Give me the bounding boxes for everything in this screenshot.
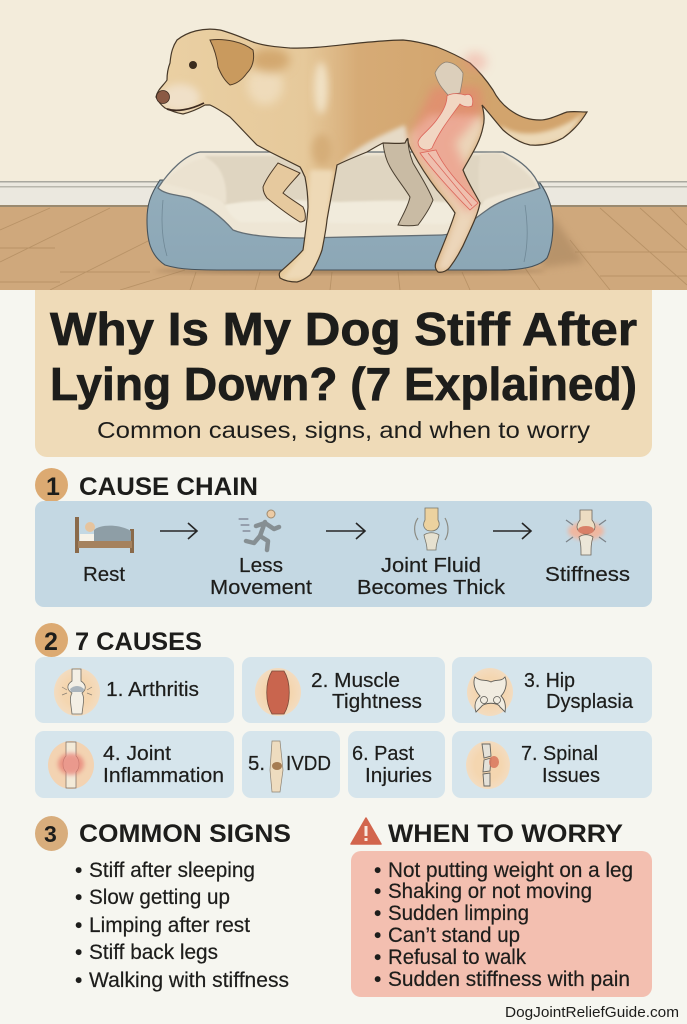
hero illustration: dog getting off a bed	[0, 0, 687, 290]
card 3: hip dysplasia	[452, 657, 652, 723]
wood floor	[0, 207, 687, 290]
card 2: muscle tightness	[242, 657, 445, 723]
list: common signs: Walking with stiffness	[89, 969, 289, 992]
dog bed	[147, 152, 553, 270]
label: less movement: Movement	[210, 576, 312, 599]
card 2: muscle tightness: Tightness	[332, 690, 422, 713]
belly shading	[337, 125, 410, 170]
card 6: past injuries: 6. Past	[352, 742, 414, 765]
right bolster	[478, 153, 537, 202]
bed back wall	[205, 155, 500, 205]
panel: when to worry: •	[374, 902, 381, 925]
icon: bed	[75, 517, 134, 553]
section 2 heading: 7 causes	[35, 623, 202, 657]
card 1: arthritis: 1. Arthritis	[106, 678, 199, 701]
list: common signs: •	[75, 969, 82, 992]
subtitle: Common causes, signs, and when to worry	[97, 417, 591, 443]
title panel	[35, 290, 652, 457]
section 1 heading: cause chain: 1	[46, 473, 60, 501]
panel: when to worry: Not putting weight on a leg	[388, 859, 633, 882]
card 7: spinal issues: Issues	[542, 764, 600, 787]
card 3: hip dysplasia: Dysplasia	[546, 690, 634, 713]
far hind leg	[383, 140, 433, 226]
label: joint fluid becomes thick	[357, 554, 506, 599]
footer: website: DogJointReliefGuide.com	[505, 1004, 679, 1021]
list: common signs: •	[75, 886, 82, 909]
left bolster	[163, 158, 226, 204]
pain glow on leg	[412, 87, 482, 212]
dog body	[150, 20, 595, 290]
list: common signs	[75, 859, 289, 992]
card 4: joint inflammation: 4. Joint	[103, 742, 171, 765]
section 3 heading: common signs	[35, 816, 291, 851]
title text	[50, 303, 637, 410]
leg bones	[418, 62, 478, 210]
icon: joint	[415, 508, 448, 550]
panel: when to worry: •	[374, 968, 381, 991]
card 5: IVDD: 5.	[248, 752, 265, 775]
panel: when to worry: Refusal to walk	[388, 946, 526, 969]
card 5: IVDD: IVDD	[286, 752, 331, 775]
label: joint fluid becomes thick: Becomes Thick	[357, 576, 506, 599]
section 2 heading: 7 causes: 7 CAUSES	[75, 628, 202, 656]
label: rest: Rest	[83, 563, 125, 586]
list: common signs: Stiff after sleeping	[89, 859, 255, 882]
bed outer blue shell	[147, 180, 553, 270]
list: common signs: •	[75, 914, 82, 937]
label: stiffness: Stiffness	[545, 563, 630, 586]
list: common signs: •	[75, 859, 82, 882]
wall	[0, 0, 687, 182]
panel: cause chain	[35, 501, 652, 607]
panel: when to worry: •	[374, 880, 381, 903]
section 3 heading: common signs: COMMON SIGNS	[79, 820, 291, 848]
muzzle colouring	[160, 84, 200, 112]
section 2 heading: 7 causes: 2	[44, 628, 58, 656]
panel: when to worry	[351, 851, 652, 997]
card 5: IVDD	[242, 731, 340, 798]
panel: when to worry: Shaking or not moving	[388, 880, 592, 903]
card 7: spinal issues	[452, 731, 652, 798]
baseboard	[0, 181, 687, 207]
section 3 heading: common signs: 3	[44, 821, 57, 847]
section 1 heading: cause chain: CAUSE CHAIN	[79, 473, 258, 501]
panel: when to worry: •	[374, 924, 381, 947]
arrow	[160, 523, 197, 539]
face	[156, 61, 204, 110]
list: common signs: Stiff back legs	[89, 941, 218, 964]
card 2: muscle tightness: 2. Muscle	[311, 669, 400, 692]
neck and shoulder colouring	[247, 65, 283, 105]
ear	[210, 39, 254, 85]
hind leg pale	[410, 115, 484, 272]
arrow	[326, 523, 365, 539]
card 7: spinal issues: 7. Spinal	[521, 742, 598, 765]
warning heading: when to worry: WHEN TO WORRY	[388, 820, 623, 848]
icon: stiff joint	[566, 510, 606, 555]
bed fleece rim	[158, 152, 540, 238]
label: less movement	[210, 554, 312, 599]
list: common signs: Slow getting up	[89, 886, 230, 909]
card 4: joint inflammation: Inflammation	[103, 764, 224, 787]
card 6: past injuries: Injuries	[365, 764, 432, 787]
arrow	[493, 523, 531, 539]
tail colouring	[500, 112, 584, 145]
section 1 heading: cause chain	[35, 468, 258, 502]
panel: when to worry: Sudden stiffness with pain	[388, 968, 630, 991]
label: joint fluid becomes thick: Joint Fluid	[381, 554, 481, 577]
panel: when to worry: Sudden limping	[388, 902, 529, 925]
card 6: past injuries	[348, 731, 445, 798]
list: common signs: •	[75, 941, 82, 964]
panel: when to worry: Can’t stand up	[388, 924, 520, 947]
list: common signs: Limping after rest	[89, 914, 250, 937]
card 1: arthritis	[35, 657, 234, 723]
icon: running figure	[239, 510, 279, 550]
icon: warning triangle	[351, 818, 381, 844]
cushion	[225, 200, 470, 224]
panel: when to worry: •	[374, 946, 381, 969]
card 3: hip dysplasia: 3. Hip	[524, 669, 575, 692]
panel: 7 causes cards	[35, 657, 652, 798]
card 4: joint inflammation	[35, 731, 234, 798]
title text: Why Is My Dog Stiff After	[50, 303, 637, 355]
rump glow	[463, 52, 487, 72]
label: less movement: Less	[239, 554, 283, 577]
bent foreleg	[263, 163, 305, 222]
panel: when to worry: •	[374, 859, 381, 882]
title text: Lying Down? (7 Explained)	[50, 358, 637, 410]
